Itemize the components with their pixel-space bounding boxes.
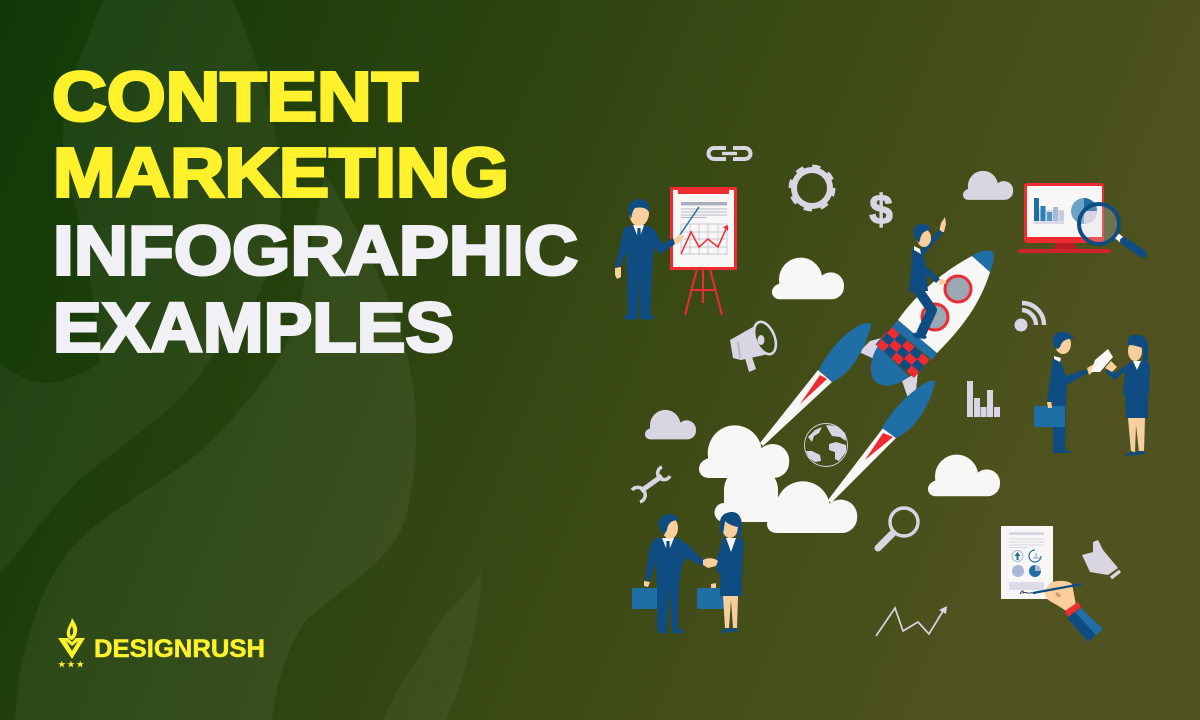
woman's briefcase [697, 588, 724, 609]
icon: bar chart [967, 381, 1000, 417]
icon: cloud, lilac top right [963, 171, 1013, 200]
icon: stars: ★★★ [58, 660, 86, 669]
document page [1001, 526, 1053, 599]
two colleagues sharing a tablet [1034, 332, 1150, 456]
man with briefcase [1034, 332, 1095, 453]
handshake [632, 512, 744, 633]
icon: flame [67, 618, 77, 640]
rocket window, upper [945, 276, 971, 302]
document being signed [1001, 526, 1103, 642]
flip chart board [670, 187, 737, 270]
icon: wrench [632, 467, 670, 502]
fin, lower [882, 381, 935, 438]
rocket check band [875, 326, 930, 378]
icon: globe [804, 424, 848, 466]
writing hand [1033, 581, 1103, 642]
icon: magnifier [878, 508, 918, 548]
monitor screen [1024, 183, 1104, 243]
man [644, 514, 703, 633]
fin, upper [819, 323, 871, 382]
icon: cloud, white right [928, 455, 1000, 496]
rocket window, lower [922, 304, 948, 330]
rocket body [898, 256, 990, 353]
heading line: EXAMPLES: EXAMPLES [53, 288, 454, 366]
screen bar chart [1034, 198, 1064, 224]
icon: V mark [58, 638, 85, 659]
heading line: CONTENT: CONTENT [52, 58, 418, 136]
monitor stand [1053, 243, 1077, 249]
woman [1105, 335, 1150, 456]
icon: gear [791, 167, 833, 209]
icon: megaphone [730, 319, 780, 372]
woman [711, 512, 744, 633]
heading line: MARKETING: MARKETING [53, 134, 509, 212]
icon: trend arrow [876, 606, 947, 636]
rocket nose [972, 250, 994, 272]
rider on rocket [909, 217, 947, 339]
man's briefcase [632, 588, 663, 609]
cloud, middle [714, 465, 778, 522]
presenter figure [615, 199, 699, 320]
magnifier over screen [1079, 204, 1143, 254]
fin connectors [859, 337, 918, 398]
title [52, 58, 578, 366]
exhaust trail, lower [828, 428, 896, 503]
heading line: INFOGRAPHIC: INFOGRAPHIC [53, 212, 578, 290]
document charts [1012, 550, 1041, 577]
logo: DesignRush [58, 618, 265, 669]
rocket blue ring [892, 320, 937, 360]
exhaust clouds [699, 425, 857, 533]
cloud, lower [767, 481, 857, 533]
icon: cloud, lilac left [645, 410, 696, 439]
icon: dollar sign: $ [869, 186, 893, 233]
cloud, upper [699, 425, 789, 478]
presenter with flip chart [615, 187, 737, 320]
screen pie chart [1071, 198, 1097, 224]
tablet [1091, 349, 1113, 372]
rocket [760, 250, 994, 503]
icon: wifi [1014, 303, 1044, 332]
icon: chain link [709, 148, 750, 159]
clasped hands [703, 558, 718, 568]
wordmark: DESIGNRUSH [94, 635, 265, 663]
document header lines [1009, 532, 1044, 548]
rocket base [871, 346, 909, 386]
icon: thumbs up [1082, 540, 1120, 578]
flip chart easel [685, 269, 722, 315]
exhaust trail, upper [760, 370, 832, 446]
document footer and signature [1009, 582, 1044, 594]
monitor with charts and magnifier [1018, 183, 1143, 254]
icon: cloud, white centre [772, 258, 844, 299]
